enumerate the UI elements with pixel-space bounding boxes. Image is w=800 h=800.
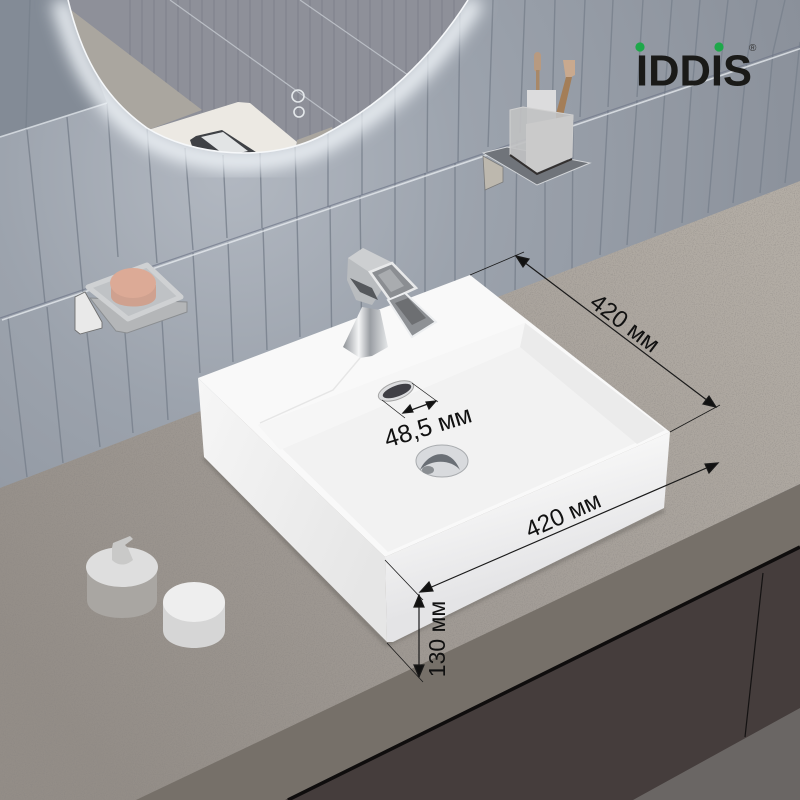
basin bowl	[258, 323, 665, 552]
basin right face	[385, 432, 670, 642]
dimension: front width 420	[385, 463, 718, 600]
logo: IDDIS: ®	[749, 43, 757, 54]
basin	[198, 275, 670, 644]
mirror touch buttons	[292, 90, 304, 117]
faucet	[343, 248, 436, 358]
label: back width: 420 мм	[585, 289, 665, 358]
basin left face	[198, 378, 387, 642]
countertop	[0, 181, 800, 752]
drain	[416, 445, 468, 477]
soap dish	[75, 265, 187, 334]
dimension: back width 420	[470, 252, 720, 432]
logo: IDDIS: IDDIS	[636, 46, 752, 96]
cabinet front	[285, 547, 800, 800]
wall tiles	[0, 0, 800, 520]
mirror with reflection	[40, 0, 490, 170]
cosmetic jar with pump	[86, 536, 158, 618]
label: overflow: 48,5 мм	[381, 400, 475, 454]
overflow slot	[376, 377, 416, 405]
basin shadow	[204, 457, 664, 644]
dimension: height 130	[387, 595, 424, 682]
white jar	[163, 582, 225, 648]
label: front width: 420 мм	[521, 487, 605, 544]
counter front edge	[136, 484, 800, 800]
label: height: 130 мм	[424, 601, 450, 677]
basin top rim	[198, 275, 670, 557]
tumbler with toothbrushes	[483, 52, 590, 190]
dimension: overflow 48.5	[382, 383, 438, 418]
